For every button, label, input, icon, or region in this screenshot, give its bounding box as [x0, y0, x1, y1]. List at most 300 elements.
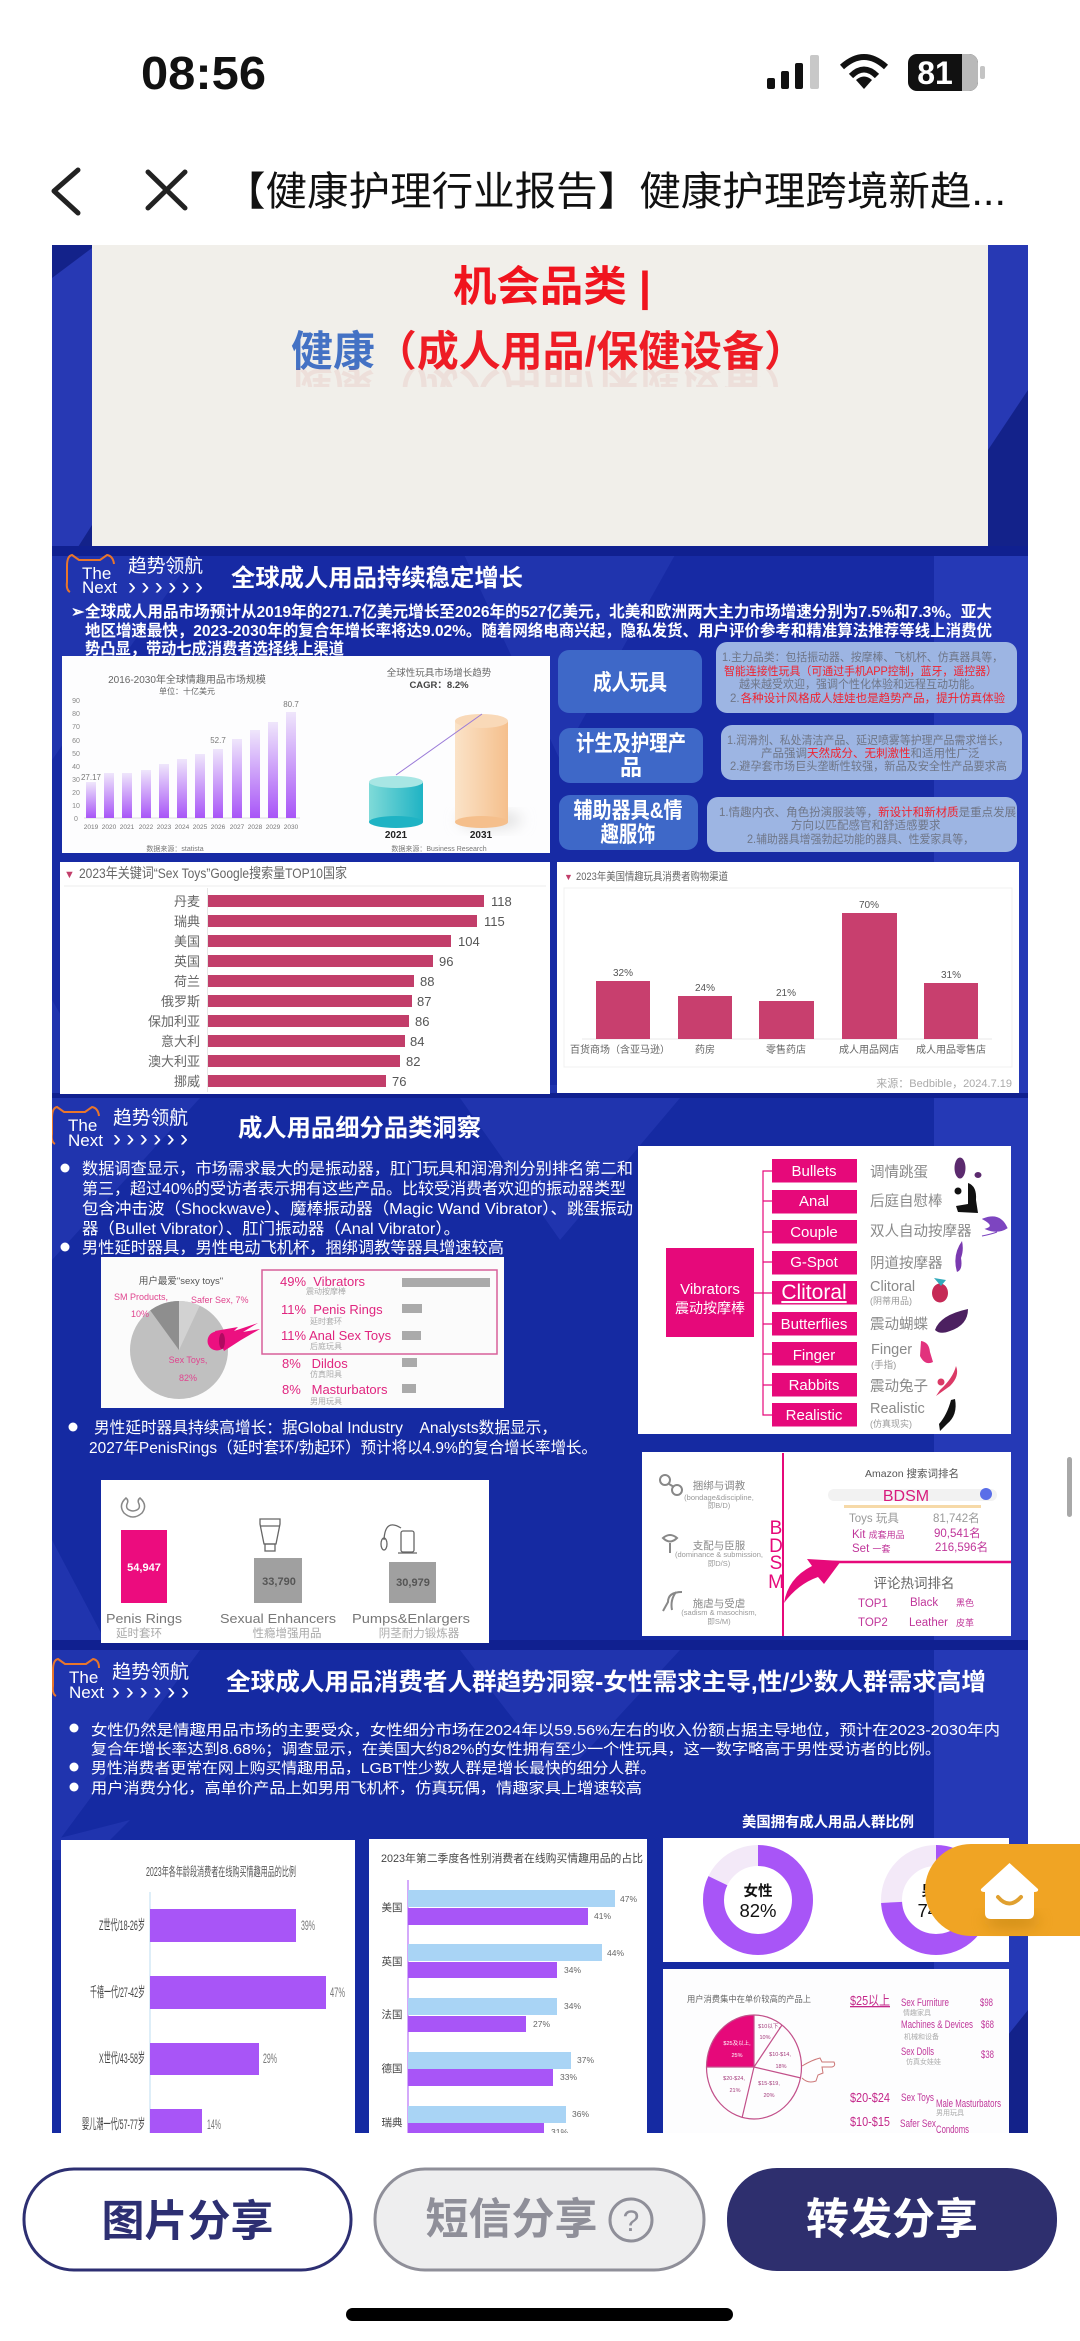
logo: 趋势领航 [112, 1661, 189, 1683]
type labels: Realistic [786, 1407, 843, 1424]
age labels: 千禧一代/27-42岁 [90, 1984, 145, 2000]
category: 计生及护理产品: 2.避孕套市场巨头垄断性较强，新品及安全性产品要求高 [730, 759, 1007, 773]
countries: 德国 [382, 2062, 402, 2075]
countries [382, 1901, 403, 2129]
values: 14% [207, 2116, 221, 2132]
review keywords: 评论热词排名 [874, 1576, 954, 1591]
horizontal bar chart: 87 [417, 994, 431, 1009]
panel: purchase channels: 2023年美国情趣玩具消费者购物渠道 [576, 869, 728, 883]
horizontal bar chart: 118 [491, 894, 512, 909]
amazon ranking: Toys 玩具 [849, 1512, 899, 1525]
title line 1: 机会品类 | [453, 263, 651, 311]
panel: product bars: 阴茎耐力锻炼器 [379, 1626, 460, 1640]
pie chart: $15-$19, [758, 2081, 780, 2087]
page title: 【健康护理行业报告】健康护理跨境新趋... [224, 170, 1006, 214]
values [533, 1894, 637, 2137]
logo: The [82, 564, 111, 583]
logo [53, 1659, 189, 1705]
product labels: Pumps&Enlargers [352, 1611, 471, 1626]
icon: wifi [842, 57, 886, 89]
toy list: 8% Dildos [282, 1356, 348, 1371]
type labels: G-Spot [790, 1254, 839, 1271]
panel: age bars [61, 1840, 355, 2137]
panel: Google search top10 [60, 862, 550, 1094]
category: 计生及护理产品: 1.润滑剂、私处清洁产品、延迟喷雾等护理产品需求增长， [727, 733, 1009, 747]
donut: male: 74% [917, 1900, 955, 1921]
horizontal bar chart: 俄罗斯 [161, 994, 200, 1009]
pie chart: 21% [729, 2088, 741, 2094]
chinese labels: (手指) [871, 1359, 896, 1371]
chart: cylinders CAGR: 2021 [385, 830, 408, 841]
bar chart: market size: 2029 [266, 824, 281, 831]
BDSM categories [675, 1479, 763, 1626]
category: 成人玩具: 成人玩具 [593, 670, 667, 695]
button: 转发分享 [727, 2168, 1057, 2271]
values: 39% [301, 1917, 315, 1933]
bullets text: 器（Bullet Vibrator）、肛门振动器（Anal Vibrator）。 [82, 1220, 460, 1238]
bar chart: market size: 40 [72, 764, 80, 771]
bar chart: market size: 2027 [230, 824, 245, 831]
values: 37% [577, 2055, 594, 2065]
icon: pointing hand [802, 2058, 835, 2082]
values: 44% [607, 1948, 624, 1958]
column chart: 药房 [695, 1043, 715, 1056]
panel: gender bars [369, 1839, 647, 2137]
pie chart: $25及以上, [723, 2039, 751, 2047]
donut: female: 82% [739, 1900, 777, 1921]
chart: cylinders CAGR: 全球性玩具市场增长趋势 [387, 667, 492, 679]
toy list: 49% Vibrators [280, 1274, 366, 1289]
panel: BDSM [642, 1452, 1011, 1636]
chart: cylinders CAGR: 数据来源：Business Research [391, 844, 487, 853]
donut: female [714, 1856, 802, 1944]
amazon ranking [828, 1467, 997, 1555]
horizontal bar chart: 76 [392, 1074, 406, 1089]
toy list [280, 1274, 490, 1406]
values: 47% [620, 1894, 637, 1904]
icons [660, 1475, 682, 1611]
bars [150, 1909, 326, 2137]
panel: product bars: 性瘾增强用品 [252, 1626, 322, 1640]
donut: male: 男性 [922, 1883, 950, 1900]
chart title: 2023年第二季度各性别消费者在线购买情趣用品的占比 [381, 1851, 643, 1865]
amazon ranking: Set 一套 [852, 1543, 890, 1555]
bullets text [70, 1721, 1000, 1797]
category: 成人玩具: 越来越受欢迎，强调个性化体验和远程互动功能。 [739, 677, 981, 691]
product labels: Penis Rings [106, 1611, 183, 1626]
category: 成人玩具: 智能连接性玩具（可通过手机APP控制，蓝牙，遥控器） [724, 664, 997, 678]
panel: price pie [663, 1969, 1009, 2139]
donut: male [892, 1856, 980, 1944]
logo: 趋势领航 [128, 555, 203, 577]
panel: favourite sexy toys [101, 1257, 504, 1408]
review keywords [858, 1576, 974, 1629]
button: 短信分享 [375, 2169, 704, 2270]
bullets text: 第三，超过40%的受访者表示拥有这些产品。比较受消费者欢迎的振动器类型 [82, 1180, 626, 1198]
source: 来源：Bedbible，2024.7.19 [876, 1076, 1012, 1090]
toy list: 震动按摩棒 [306, 1286, 346, 1296]
panel: product bars: 延时套环 [116, 1627, 162, 1640]
price list: Sex Toys [901, 2092, 934, 2104]
values: 33% [560, 2072, 577, 2082]
horizontal bar chart [148, 894, 512, 1089]
icon: pump [381, 1525, 417, 1553]
bar: enhancers [254, 1558, 302, 1603]
pie chart: $10以下, [758, 2023, 780, 2030]
amazon ranking: BDSM [883, 1488, 929, 1505]
toy list: 男用玩具 [310, 1397, 342, 1406]
bullets text: 包含冲击波（Shockwave）、魔棒振动器（Magic Wand Vibrator）、跳蛋振动 [82, 1200, 633, 1218]
slide 1 [52, 245, 1028, 547]
bar chart: market size: 27.17 [81, 773, 102, 782]
logo: ›››››› [113, 1125, 188, 1152]
price list: Safer Sex [900, 2118, 936, 2130]
button: 短信分享: 短信分享 [426, 2196, 598, 2244]
horizontal bar chart: 保加利亚 [148, 1014, 200, 1029]
slide 3 [52, 1098, 1028, 1650]
BDSM letters: B [770, 1518, 782, 1539]
age labels: Z世代/18-26岁 [99, 1917, 145, 1933]
icon: tube [260, 1519, 280, 1551]
bar chart: market size: 20 [72, 790, 80, 797]
intro text: 全球成人用品市场预计从2019年的271.7亿美元增长至2026年的527亿美元，北美和欧洲两大主力市场增速分别为7.5%和7.3%。亚大 [85, 602, 992, 621]
review keywords: TOP2 [858, 1617, 888, 1629]
price list: Condoms [936, 2124, 969, 2136]
type labels: Bullets [791, 1163, 837, 1180]
logo: Next [69, 1683, 104, 1702]
chart title: 用户消费集中在单价较高的产品上 [687, 1994, 811, 2004]
category: 成人玩具: 2.各种设计风格成人娃娃也是趋势产品，提升仿真体验 [730, 691, 1006, 705]
type boxes [772, 1159, 857, 1426]
type labels: Rabbits [789, 1377, 839, 1394]
title line 2: 健康（成人用品/保健设备） [291, 328, 806, 375]
horizontal bar chart: 96 [439, 954, 453, 969]
heading: 成人用品细分品类洞察 [238, 1115, 481, 1142]
BDSM categories: 即B/D) [708, 1501, 731, 1510]
bar chart: market size: 2024 [175, 824, 190, 831]
panel: donuts [663, 1838, 1009, 1962]
icon: back [54, 170, 78, 213]
logo [66, 554, 202, 593]
chinese labels: Clitoral [870, 1279, 915, 1295]
BDSM letters: S [770, 1553, 782, 1574]
bullets text [60, 1160, 633, 1257]
countries: 英国 [382, 1955, 402, 1968]
logo: ›››››› [128, 573, 203, 600]
bullets text: 用户消费分化，高单价产品上如男用飞机杯，仿真玩偶，情趣家具上增速较高 [91, 1779, 642, 1797]
intro text: 地区增速最快，2023-2030年的复合年增长率将达9.02%。随着网络电商兴起，隐私发货、用户评价参考和精准算法推荐等线上消费优 [85, 621, 992, 640]
slide 4 [52, 1650, 1028, 2139]
horizontal bar chart: 英国 [174, 954, 200, 969]
chinese labels [870, 1164, 972, 1429]
pie chart: Sex Toys, [169, 1355, 207, 1365]
bar chart: market size: 90 [72, 698, 80, 705]
bar chart: market size: 70 [72, 724, 80, 731]
values: 47% [330, 1984, 345, 2000]
chinese labels: 震动兔子 [870, 1378, 928, 1395]
panel: market size charts [62, 656, 550, 853]
purple bars [408, 1908, 588, 2135]
type labels: Finger [793, 1347, 835, 1364]
price list: $10-$15 [850, 2114, 890, 2129]
horizontal bar chart: 84 [410, 1034, 424, 1049]
bar: pumps: 30,979 [396, 1577, 430, 1589]
category: 辅助器具&情趣服饰: 方向以匹配感官和舒适感要求 [791, 818, 941, 832]
price list: $20-$24 [850, 2090, 890, 2105]
BDSM categories: (bondage&discipline, [684, 1493, 754, 1502]
bar chart: market size: 80 [72, 711, 80, 718]
BDSM letters: M [768, 1572, 784, 1593]
bullets text: 男性延时器具，男性电动飞机杯，捆绑调教等器具增速较高 [82, 1239, 504, 1257]
chart: cylinders CAGR: 2031 [470, 830, 493, 841]
horizontal bar chart: 瑞典 [174, 914, 200, 929]
bullets text: 女性仍然是情趣用品市场的主要受众，女性细分市场在2024年以59.56%左右的收入份额占据主导地位，预计在2023-2030年内 [91, 1721, 1000, 1739]
bar chart: market size: 10 [72, 803, 80, 810]
chinese labels: (仿真现实) [870, 1418, 912, 1429]
icon: signal [767, 55, 819, 89]
bar chart: market size: 2026 [211, 824, 226, 831]
donut: female: 女性 [744, 1882, 772, 1900]
horizontal bar chart: 丹麦 [174, 894, 200, 909]
panel: vibrators tree [638, 1146, 1011, 1434]
root box [666, 1248, 754, 1337]
price list: $98 [980, 1997, 993, 2009]
price list: $38 [981, 2049, 994, 2061]
icon: close [148, 172, 185, 208]
bar chart: market size: 2020 [102, 824, 117, 831]
panel: purchase channels [557, 862, 1019, 1093]
logo: The [68, 1116, 97, 1135]
intro text [71, 602, 992, 658]
penis ring growth text: 2027年PenisRings（延时套环/勃起环）预计将以4.9%的复合增长率增长。 [89, 1439, 597, 1457]
chart title: 2023年各年龄段消费者在线购买情趣用品的比例 [146, 1864, 296, 1879]
values: 36% [572, 2109, 589, 2119]
pie chart: 10% [759, 2035, 771, 2041]
pie chart: 82% [179, 1373, 197, 1383]
product labels: Sexual Enhancers [220, 1611, 337, 1626]
price list: $25以上 [850, 1993, 890, 2008]
review keywords: Leather [909, 1617, 948, 1629]
pie chart: 20% [763, 2093, 775, 2099]
category: 辅助器具&情趣服饰 [559, 795, 1017, 852]
horizontal bar chart: 104 [458, 934, 480, 949]
button: 图片分享 [24, 2169, 351, 2270]
toy list: 11% Penis Rings [281, 1302, 383, 1317]
highlight box [262, 1270, 497, 1354]
chinese labels: 双人自动按摩器 [870, 1222, 972, 1240]
BDSM categories: 捆绑与调教 [693, 1479, 746, 1492]
values [207, 1917, 345, 2132]
toy list: 延时套环 [310, 1316, 342, 1326]
toy list: 后庭玩具 [310, 1341, 342, 1351]
pie chart: 18% [775, 2064, 787, 2070]
penis ring growth text: 男性延时器具持续高增长：据Global Industry Analysts数据显示， [94, 1419, 557, 1437]
BDSM categories: (sadism & masochism, [681, 1608, 757, 1617]
bar: penis rings [121, 1530, 167, 1603]
horizontal bar chart: 美国 [174, 934, 200, 949]
bar chart: market size: 52.7 [210, 736, 226, 745]
BDSM categories: (dominance & submission, [675, 1550, 763, 1559]
column chart: 32% [613, 968, 633, 979]
amazon ranking: Amazon 搜索词排名 [865, 1467, 959, 1480]
panel: Google search top10: 2023年关键词“Sex Toys”Google搜索量TOP10国家 [79, 865, 347, 881]
price list: 机械和设备 [904, 2032, 939, 2041]
category: 辅助器具&情趣服饰: 2.辅助器具增强勃起功能的器具、性爱家具等， [747, 832, 974, 846]
type labels: Clitoral [781, 1281, 847, 1304]
price list: $68 [981, 2019, 994, 2031]
pie chart: 25% [731, 2053, 743, 2059]
review keywords: 皮革 [956, 1617, 974, 1628]
category: 成人玩具 [558, 642, 1017, 713]
bar chart: market size: 2030 [284, 824, 299, 831]
bar chart: market size: 2019 [84, 824, 99, 831]
type labels: Butterflies [781, 1316, 847, 1333]
nav bar [54, 170, 1006, 214]
age labels [82, 1917, 145, 2132]
horizontal bar chart: 86 [415, 1014, 429, 1029]
floating home button [925, 1844, 1080, 1936]
logo: 趋势领航 [113, 1107, 188, 1129]
amazon ranking: 90,541名 [934, 1526, 981, 1540]
BDSM letters [768, 1518, 784, 1593]
bar chart: market size: 50 [72, 751, 80, 758]
bar chart: market size: 2016-2030年全球情趣用品市场规模 [108, 673, 266, 686]
price list: 男用玩具 [936, 2109, 964, 2117]
bar chart: market size: 30 [72, 777, 80, 784]
category: 计生及护理产品 [559, 725, 1022, 783]
toy icons [920, 1158, 1007, 1431]
title reflection: 健康（成人用品/保健设备） [291, 363, 806, 410]
pie chart: $20-$24, [723, 2076, 745, 2082]
horizontal bar chart: 意大利 [161, 1034, 200, 1049]
pie chart [706, 2015, 802, 2119]
bar chart: market size: 60 [72, 738, 80, 745]
logo: ›››››› [112, 1678, 189, 1705]
bar chart: market size: 2025 [193, 824, 208, 831]
chinese labels: Finger [871, 1342, 912, 1358]
values: 34% [564, 1965, 581, 1975]
icon: battery 81 [908, 54, 985, 91]
logo: Next [82, 578, 117, 597]
type labels: Couple [790, 1224, 838, 1241]
bar chart: market size: 单位：十亿美元 [159, 686, 215, 696]
price list: Sex Furniture [901, 1997, 949, 2009]
panel: product bars [101, 1480, 489, 1643]
icon: battery 81: 81 [917, 55, 953, 91]
price list: Machines & Devices [901, 2019, 973, 2031]
toy list: 11% Anal Sex Toys [281, 1328, 392, 1343]
logo: Next [68, 1131, 103, 1150]
BDSM categories: 即D/S) [708, 1559, 731, 1568]
chinese labels: Realistic [870, 1401, 925, 1417]
bullets text: 男性消费者更常在网上购买情趣用品，LGBT性少数人群是增长最快的细分人群。 [91, 1760, 656, 1777]
root box: 震动按摩棒 [675, 1300, 745, 1316]
values: 27% [533, 2019, 550, 2029]
amazon ranking: 216,596名 [935, 1540, 988, 1554]
pie chart: Safer Sex, 7% [191, 1295, 249, 1305]
column chart: 成人用品零售店 [916, 1043, 986, 1056]
blue bars [408, 1890, 615, 2123]
BDSM letters: D [769, 1536, 783, 1557]
bar chart: market size: 2022 [139, 824, 154, 831]
bar chart: market size: 80.7 [283, 700, 299, 709]
slide 2 [52, 546, 1028, 1099]
heading: 全球成人用品持续稳定增长 [231, 565, 523, 592]
arrow [784, 1559, 841, 1603]
horizontal bar chart: 88 [420, 974, 434, 989]
values: 41% [594, 1911, 611, 1921]
BDSM categories: 施虐与受虐 [693, 1597, 745, 1610]
category: 辅助器具&情趣服饰: 1.情趣内衣、角色扮演服装等，新设计和新材质是重点发展 [719, 805, 1017, 819]
column chart: 零售药店 [766, 1043, 806, 1056]
chart: cylinders CAGR: CAGR：8.2% [409, 680, 469, 691]
review keywords: 黑色 [956, 1597, 974, 1608]
price list: Male Masturbators [936, 2098, 1001, 2110]
values: 31% [551, 2127, 568, 2137]
panel title: ▼ [564, 872, 573, 882]
category: 计生及护理产品: 计生及护理产 [576, 731, 686, 756]
chinese labels: (阴蒂用品) [870, 1295, 912, 1306]
horizontal bar chart: 82 [406, 1054, 420, 1069]
pie chart: 10% [131, 1309, 149, 1319]
BDSM categories: 支配与臣服 [693, 1540, 746, 1552]
price list [850, 1993, 1001, 2136]
column chart: 24% [695, 983, 715, 994]
chinese labels: 震动蝴蝶 [870, 1316, 928, 1333]
logo: The [69, 1668, 98, 1687]
BDSM categories: 即S/M) [707, 1617, 731, 1626]
bar chart: market size: 2028 [248, 824, 263, 831]
logo [52, 1106, 188, 1146]
category: 辅助器具&情趣服饰: 趣服饰 [600, 822, 656, 847]
icon: comet [208, 1323, 260, 1351]
clock: 08:56 [141, 47, 266, 99]
donut heading: 美国拥有成人用品人群比例 [742, 1813, 914, 1831]
column chart: 70% [859, 900, 879, 911]
bar chart: market size: 2023 [157, 824, 172, 831]
type labels [781, 1163, 847, 1424]
bar: penis rings: 54,947 [127, 1562, 161, 1574]
age labels: X世代/43-58岁 [99, 2050, 145, 2066]
toy list: 仿真阳具 [310, 1369, 342, 1379]
review keywords: Black [910, 1597, 938, 1609]
column chart [570, 900, 992, 1056]
category: 辅助器具&情趣服饰: 辅助器具&情 [574, 798, 682, 823]
panel title: ▼ [64, 869, 75, 881]
toy list: 8% Masturbators [282, 1382, 388, 1397]
pie chart: SM Products, [114, 1292, 168, 1302]
pie chart: 用户最爱"sexy toys" [139, 1275, 223, 1287]
icon: house [981, 1863, 1038, 1919]
chinese labels: 阴道按摩器 [870, 1254, 943, 1272]
bullets text: 复合年增长率达到8.68%；调查显示，在美国大约82%的女性拥有至少一个性玩具，这一数字略高于男性受访者的比例。 [91, 1740, 941, 1758]
bar chart: market size: 0 [74, 816, 78, 823]
button: 短信分享: ? [623, 2205, 639, 2238]
root box: Vibrators [680, 1281, 740, 1298]
chinese labels: 调情跳蛋 [870, 1164, 928, 1181]
product labels [106, 1611, 471, 1626]
bar: enhancers: 33,790 [262, 1576, 296, 1588]
pie chart: $10-$14, [769, 2052, 791, 2058]
amazon ranking: 81,742名 [933, 1511, 980, 1525]
price list: 情趣家具 [903, 2008, 931, 2017]
button: 图片分享: 图片分享 [102, 2198, 274, 2246]
intro text: 势凸显，带动七成消费者选择线上渠道 [85, 639, 344, 658]
amazon ranking: Kit 成套用品 [852, 1529, 905, 1541]
review keywords: TOP1 [858, 1598, 888, 1610]
column chart: 31% [941, 970, 961, 981]
bullets text: 数据调查显示，市场需求最大的是振动器，肛门玩具和润滑剂分别排名第二和 [82, 1160, 633, 1178]
